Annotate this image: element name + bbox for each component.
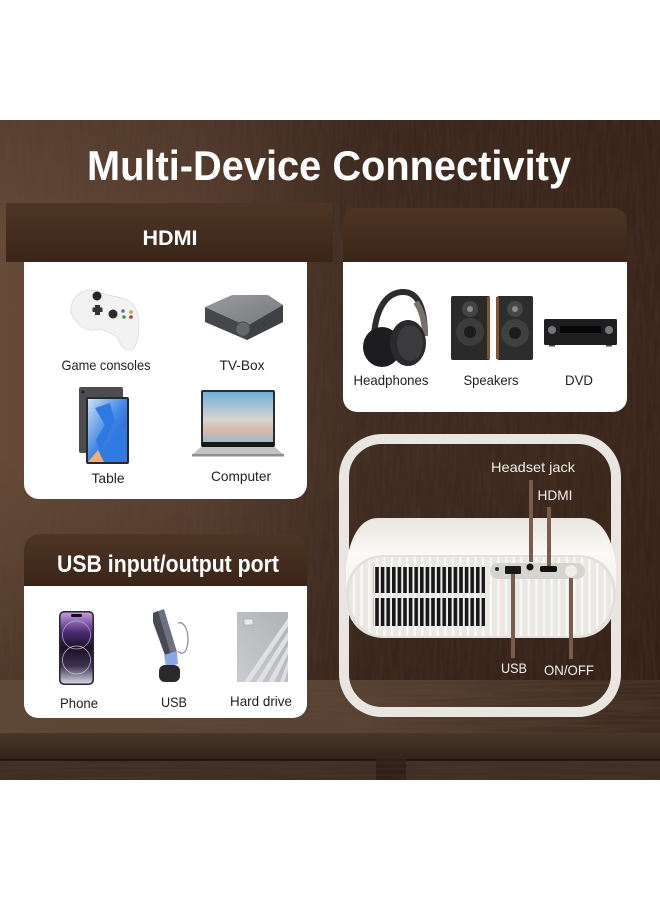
label: Phone: Phone: [60, 695, 98, 711]
audio header band: [343, 208, 627, 262]
label: Game consoles: Game consoles: [62, 357, 150, 373]
HDMI heading: HDMI: [142, 227, 198, 250]
panel: USB input/output port: [24, 534, 307, 718]
label: Computer: Computer: [211, 468, 271, 484]
icon: tablet: [79, 387, 129, 464]
projector body: [346, 518, 616, 638]
wooden shelf and drawers: [0, 680, 660, 780]
port plate: [490, 563, 585, 579]
line: headset jack: [529, 480, 533, 562]
label: TV-Box: TV-Box: [220, 357, 264, 373]
line: ON/OFF: [569, 578, 573, 659]
icon: headphones: [363, 292, 426, 367]
ventilation grille: [373, 567, 485, 626]
icon: game controller: [71, 290, 139, 350]
HDMI header band: [6, 203, 333, 262]
label: Speakers: Speakers: [464, 372, 518, 388]
label: Headset jack: Headset jack: [491, 459, 576, 475]
title: Multi-Device Connectivity: [87, 142, 572, 189]
USB panel body: [24, 586, 307, 718]
icon: USB hub: [153, 609, 188, 682]
USB header band: [24, 534, 307, 586]
USB heading: USB input/output port: [57, 551, 279, 578]
icon: laptop: [192, 390, 284, 456]
audio panel body: [343, 262, 627, 412]
label: ON/OFF: ON/OFF: [544, 662, 594, 678]
label: USB device: USB: [161, 694, 187, 710]
icon: phone: [59, 611, 94, 685]
label: USB port: USB: [501, 660, 527, 676]
label: Hard drive: Hard drive: [230, 693, 292, 709]
icon: hard drive: [237, 612, 288, 682]
label: Table: Table: [92, 470, 125, 486]
label: Headphones: Headphones: [354, 372, 428, 388]
panel: audio and video outputs: [343, 208, 627, 412]
HDMI panel body: [24, 262, 307, 499]
label: DVD: DVD: [565, 372, 593, 388]
icon: TV box: [205, 295, 283, 340]
panel: HDMI: [6, 203, 333, 499]
icon: speakers: [451, 296, 533, 360]
panel: projector ports view: [344, 439, 616, 712]
line: USB: [511, 574, 515, 658]
label: HDMI port: HDMI: [538, 487, 572, 503]
rounded white frame: [344, 439, 616, 712]
line: HDMI: [547, 507, 551, 566]
icon: DVD receiver: [544, 319, 617, 346]
